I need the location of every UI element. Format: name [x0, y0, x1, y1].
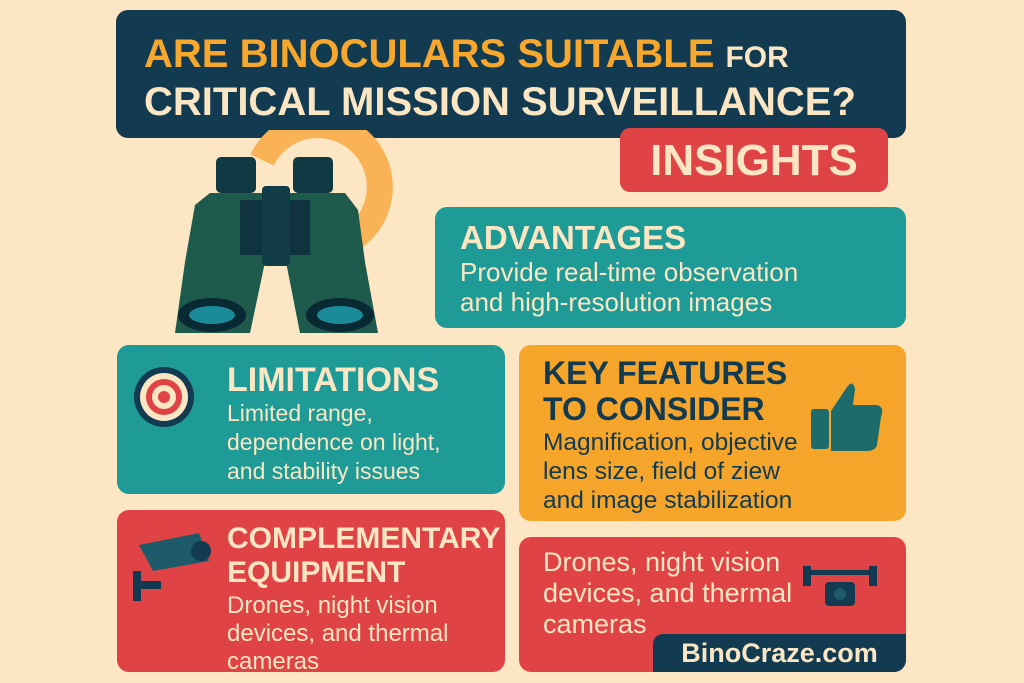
- panel: complementary equipment: [117, 510, 505, 672]
- icon: target: [134, 367, 194, 427]
- panel: limitations: LIMITATIONS: [227, 361, 439, 399]
- panel: limitations: Limited range,: [227, 400, 373, 426]
- icon: thumbs up: [811, 384, 882, 451]
- panel: key features: Magnification, objective: [543, 429, 798, 456]
- panel: complementary equipment: devices, and thermal: [227, 620, 448, 647]
- panel: key features: and image stabilization: [543, 487, 792, 514]
- panel: key features: TO CONSIDER: [543, 391, 765, 427]
- panel: advantages: ADVANTAGES: [460, 219, 686, 256]
- panel: complementary equipment: EQUIPMENT: [227, 556, 405, 589]
- title line 2: CRITICAL MISSION SURVEILLANCE?: [144, 80, 856, 124]
- panel: limitations: [117, 345, 505, 494]
- panel: complementary equipment: Drones, night vision: [227, 592, 438, 619]
- panel: limitations: and stability issues: [227, 458, 420, 484]
- panel: limitations: dependence on light,: [227, 429, 441, 455]
- panel: key features: KEY FEATURES: [543, 355, 787, 391]
- panel: drones: [519, 537, 906, 672]
- insights tag: INSIGHTS: [650, 136, 858, 185]
- title box: [116, 10, 906, 138]
- title line 1: ARE BINOCULARS SUITABLE FOR: [144, 32, 789, 76]
- footer: website: [653, 634, 906, 672]
- panel: key features: [519, 345, 906, 521]
- insights tag: [620, 128, 888, 192]
- panel: advantages: Provide real-time observation: [460, 257, 798, 287]
- panel: complementary equipment: cameras: [227, 648, 319, 675]
- panel: complementary equipment: COMPLEMENTARY: [227, 522, 500, 555]
- panel: advantages: [435, 207, 906, 328]
- icon: security camera: [133, 533, 211, 601]
- panel: advantages: and high-resolution images: [460, 287, 772, 317]
- panel: drones: Drones, night vision: [543, 547, 780, 577]
- icon: binoculars with question mark: [175, 130, 393, 333]
- panel: drones: cameras: [543, 609, 647, 639]
- panel: drones: devices, and thermal: [543, 578, 792, 608]
- footer: website: BinoCraze.com: [681, 638, 878, 668]
- icon: drone: [803, 566, 877, 606]
- panel: key features: lens size, field of ziew: [543, 458, 780, 485]
